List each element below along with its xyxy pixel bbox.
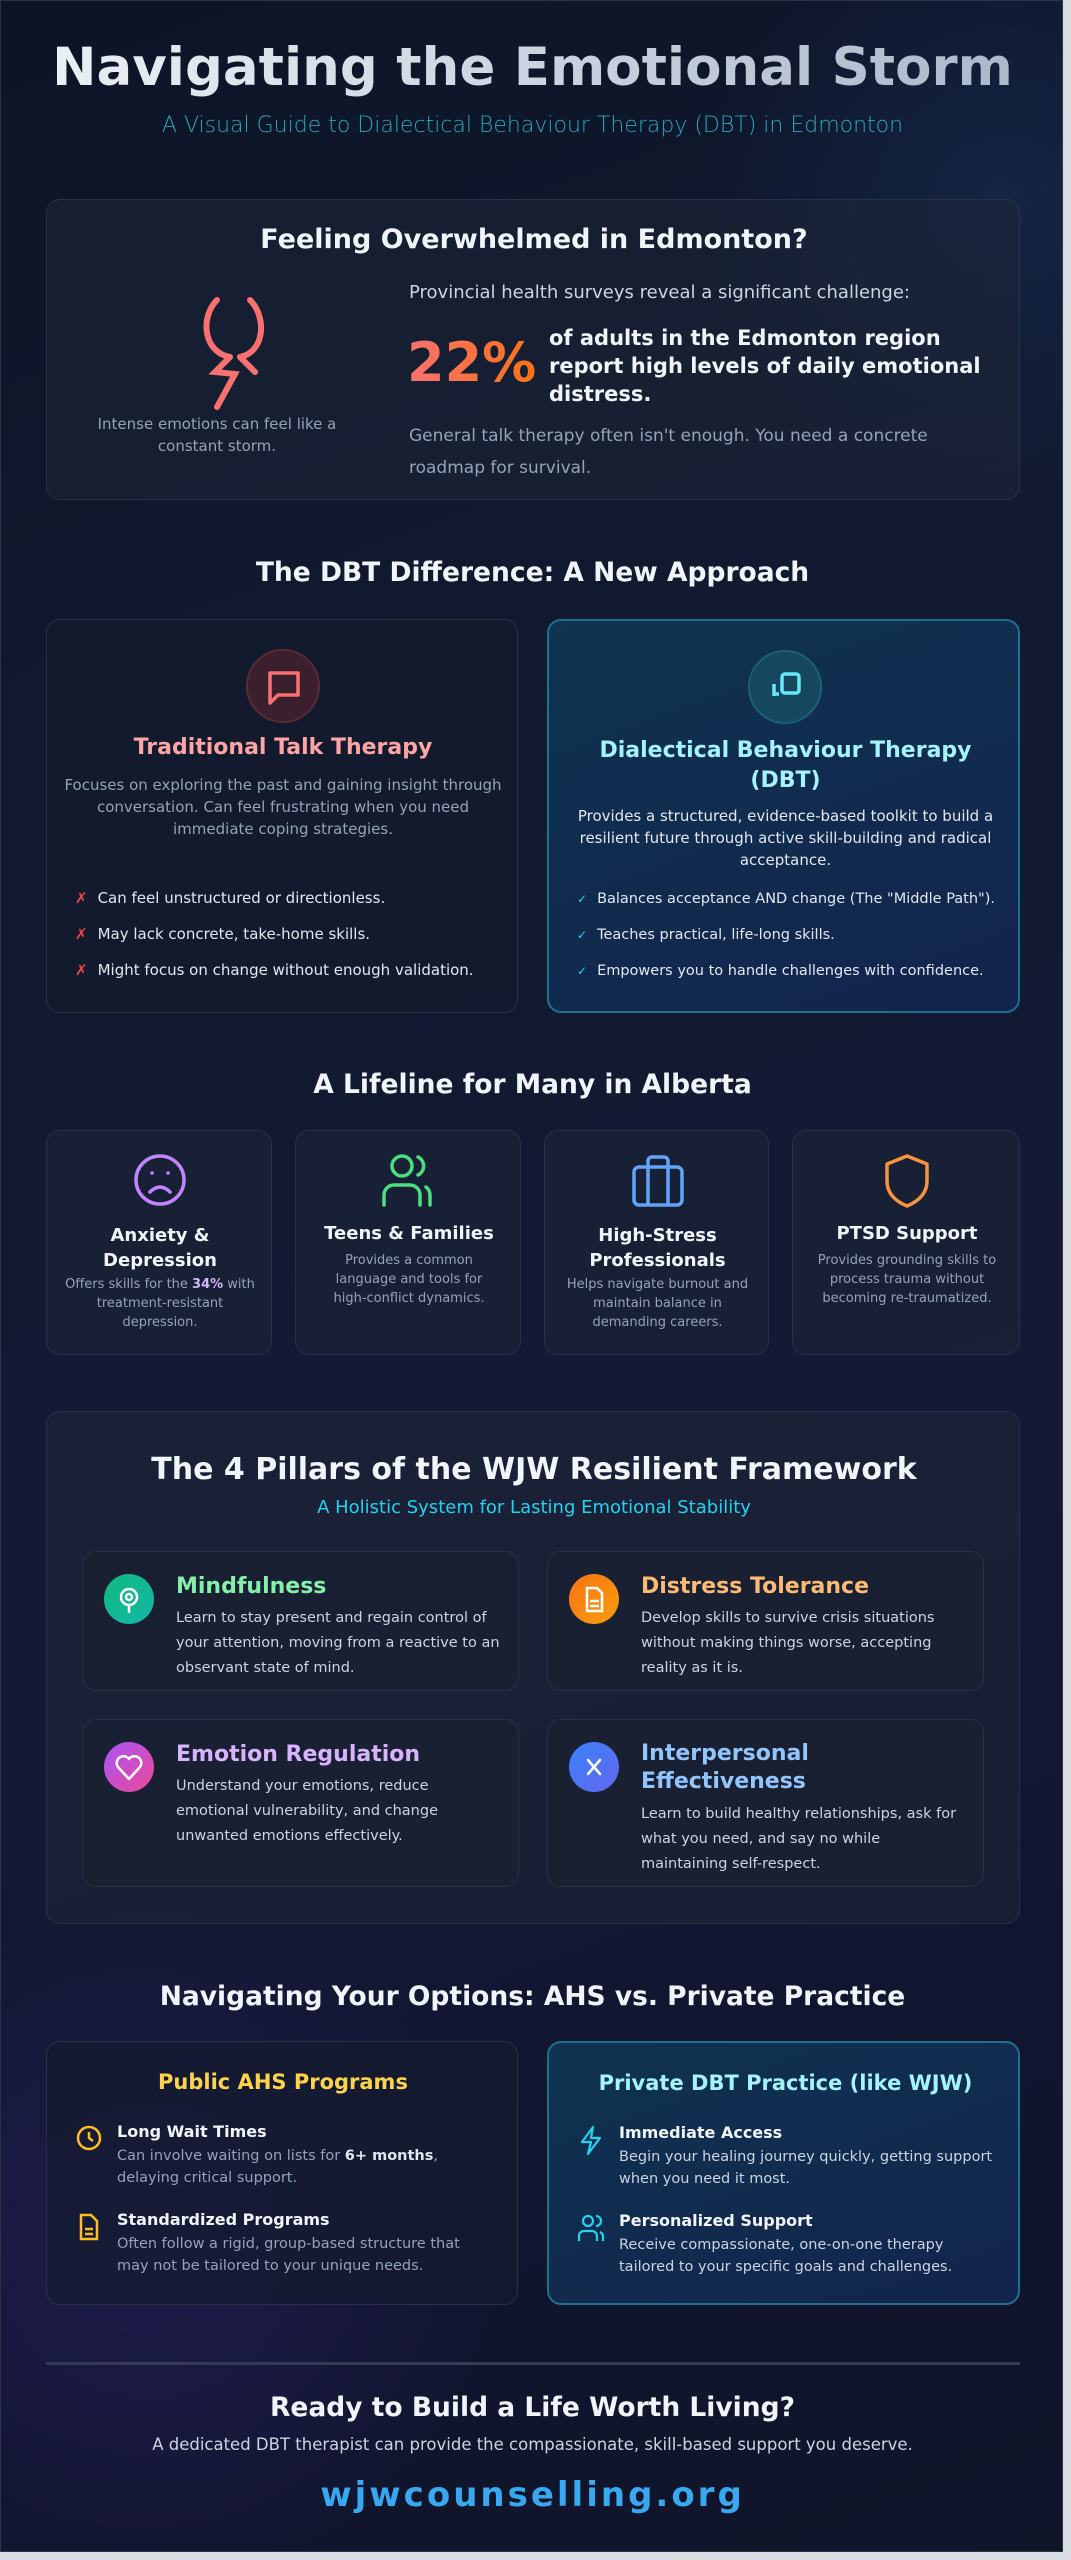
list: pros: ✓ Empowers you to handle challenges with confidence. [577,963,984,979]
icon: speech bubble [246,649,320,723]
item: standardized: Standardized Programs [117,2210,330,2229]
item: personalized: Receive compassionate, one-on-one therapy tailored to your specific goals and challenges. [619,2237,952,2275]
list: pros [577,891,995,979]
card title: (DBT) [750,768,821,793]
text: Develop skills to survive crisis situations without making things worse, accepting reality as it is. [641,1610,934,1676]
icon [104,1742,154,1792]
title: Distress Tolerance [641,1574,869,1599]
icon: sad face [134,1154,186,1206]
icon: storm [204,297,264,410]
item: wait times: Long Wait Times [117,2122,267,2141]
item: personalized [578,2211,952,2275]
pillar: emotion regulation [82,1719,519,1887]
description: Provides a structured, evidence-based toolkit to build a resilient future through active skill-building and radical acceptance. [578,807,993,869]
cta text: A dedicated DBT therapist can provide the compassionate, skill-based support you deserve. [152,2435,913,2454]
list: cons: ✗ May lack concrete, take-home skills. [75,925,370,943]
icon: clock [76,2126,102,2150]
icon: shield [885,1154,929,1208]
list: cons [75,889,474,979]
item: standardized: Often follow a rigid, group-based structure that may not be tailored to your unique needs. [117,2236,460,2274]
card title: Traditional Talk Therapy [134,735,432,760]
icon: briefcase [632,1155,684,1207]
stat text: of adults in the Edmonton region report high levels of daily emotional distress. [549,326,981,406]
stat 22%: 22% [407,331,536,394]
card: professionals [544,1130,769,1355]
subtitle: A Visual Guide to Dialectical Behaviour Therapy (DBT) in Edmonton [162,113,903,138]
icon: users [578,2214,604,2241]
heading: options: Navigating Your Options: AHS vs. Private Practice [160,1981,905,2012]
panel: feeling overwhelmed [46,199,1020,500]
heading: The 4 Pillars of the WJW Resilient Framework [151,1452,917,1487]
icon: bolt [580,2126,602,2155]
title: Private DBT Practice (like WJW) [599,2071,972,2095]
panel: traditional talk therapy [46,619,518,1013]
panel: private DBT [547,2041,1020,2305]
icon [569,1742,619,1792]
icon: dbt [748,650,822,724]
icon [104,1574,154,1624]
text: Offers skills for the 34% with treatment-resistant depression. [65,1277,255,1330]
card: anxiety [46,1130,272,1355]
text: Provides a common language and tools for high-conflict dynamics. [333,1253,485,1306]
card: teens [295,1130,521,1355]
title: Emotion Regulation [176,1742,420,1767]
list: cons: ✗ Can feel unstructured or directionless. [75,889,385,907]
heading: DBT difference: The DBT Difference: A New Approach [256,557,809,588]
item: immediate: Immediate Access [619,2123,782,2142]
text: Provides grounding skills to process trauma without becoming re-traumatized. [818,1253,996,1306]
item: wait times: Can involve waiting on lists for 6+ months, delaying critical support. [117,2148,438,2186]
pillar: distress tolerance [547,1551,984,1691]
panel: 4 pillars [46,1411,1020,1924]
heading: Feeling Overwhelmed in Edmonton? [260,224,808,255]
item: personalized: Personalized Support [619,2211,813,2230]
text: roadmap: General talk therapy often isn't enough. You need a concrete roadmap for survival. [409,426,928,478]
card title: Dialectical Behaviour Therapy [599,738,972,763]
list: pros: ✓ Balances acceptance AND change (The "Middle Path"). [577,891,995,907]
title [589,1225,726,1271]
panel: public AHS [46,2041,518,2305]
website url: wjwcounselling.org [320,2475,745,2515]
subheading: A Holistic System for Lasting Emotional Stability [317,1497,751,1518]
title: Professionals [589,1250,726,1271]
text: Understand your emotions, reduce emotional vulnerability, and change unwanted emotions effectively. [176,1778,438,1844]
item: immediate [580,2123,992,2187]
title: PTSD Support [836,1223,978,1244]
text: Helps navigate burnout and maintain balance in demanding careers. [567,1277,748,1330]
title [103,1225,217,1271]
card title [599,738,972,793]
title: High-Stress [598,1225,717,1246]
title [641,1741,809,1794]
heading: lifeline: A Lifeline for Many in Alberta [313,1069,752,1100]
card: ptsd [792,1130,1020,1355]
title: Navigating the Emotional Storm [52,37,1013,98]
icon: document [80,2214,98,2240]
heading: call to action: Ready to Build a Life Worth Living? [270,2392,795,2423]
icon [569,1574,619,1624]
title: Interpersonal [641,1741,809,1766]
icon: users [382,1154,432,1207]
list: cons: ✗ Might focus on change without enough validation. [75,961,474,979]
panel: DBT [547,619,1020,1013]
pillar: mindfulness [82,1551,519,1691]
title: Public AHS Programs [158,2070,408,2094]
pillar: interpersonal [547,1719,984,1887]
title: Effectiveness [641,1769,806,1794]
title: Mindfulness [176,1574,326,1599]
title: Depression [103,1250,217,1271]
item: immediate: Begin your healing journey quickly, getting support when you need it most. [619,2149,992,2187]
title: Teens & Families [324,1223,494,1244]
text: intro: Provincial health surveys reveal a significant challenge: [409,282,910,303]
text: Learn to stay present and regain control of your attention, moving from a reactive to an observant state of mind. [176,1610,500,1676]
caption: Intense emotions can feel like a constant storm. [98,415,336,455]
list: pros: ✓ Teaches practical, life-long skills. [577,927,835,943]
description: Focuses on exploring the past and gaining insight through conversation. Can feel frustrating when you need immediate coping strategies. [64,776,502,838]
item: wait times [76,2122,438,2186]
item: standardized [80,2210,460,2274]
text: Learn to build healthy relationships, ask for what you need, and say no while maintaining self-respect. [641,1806,956,1872]
title: Anxiety & [110,1225,210,1246]
